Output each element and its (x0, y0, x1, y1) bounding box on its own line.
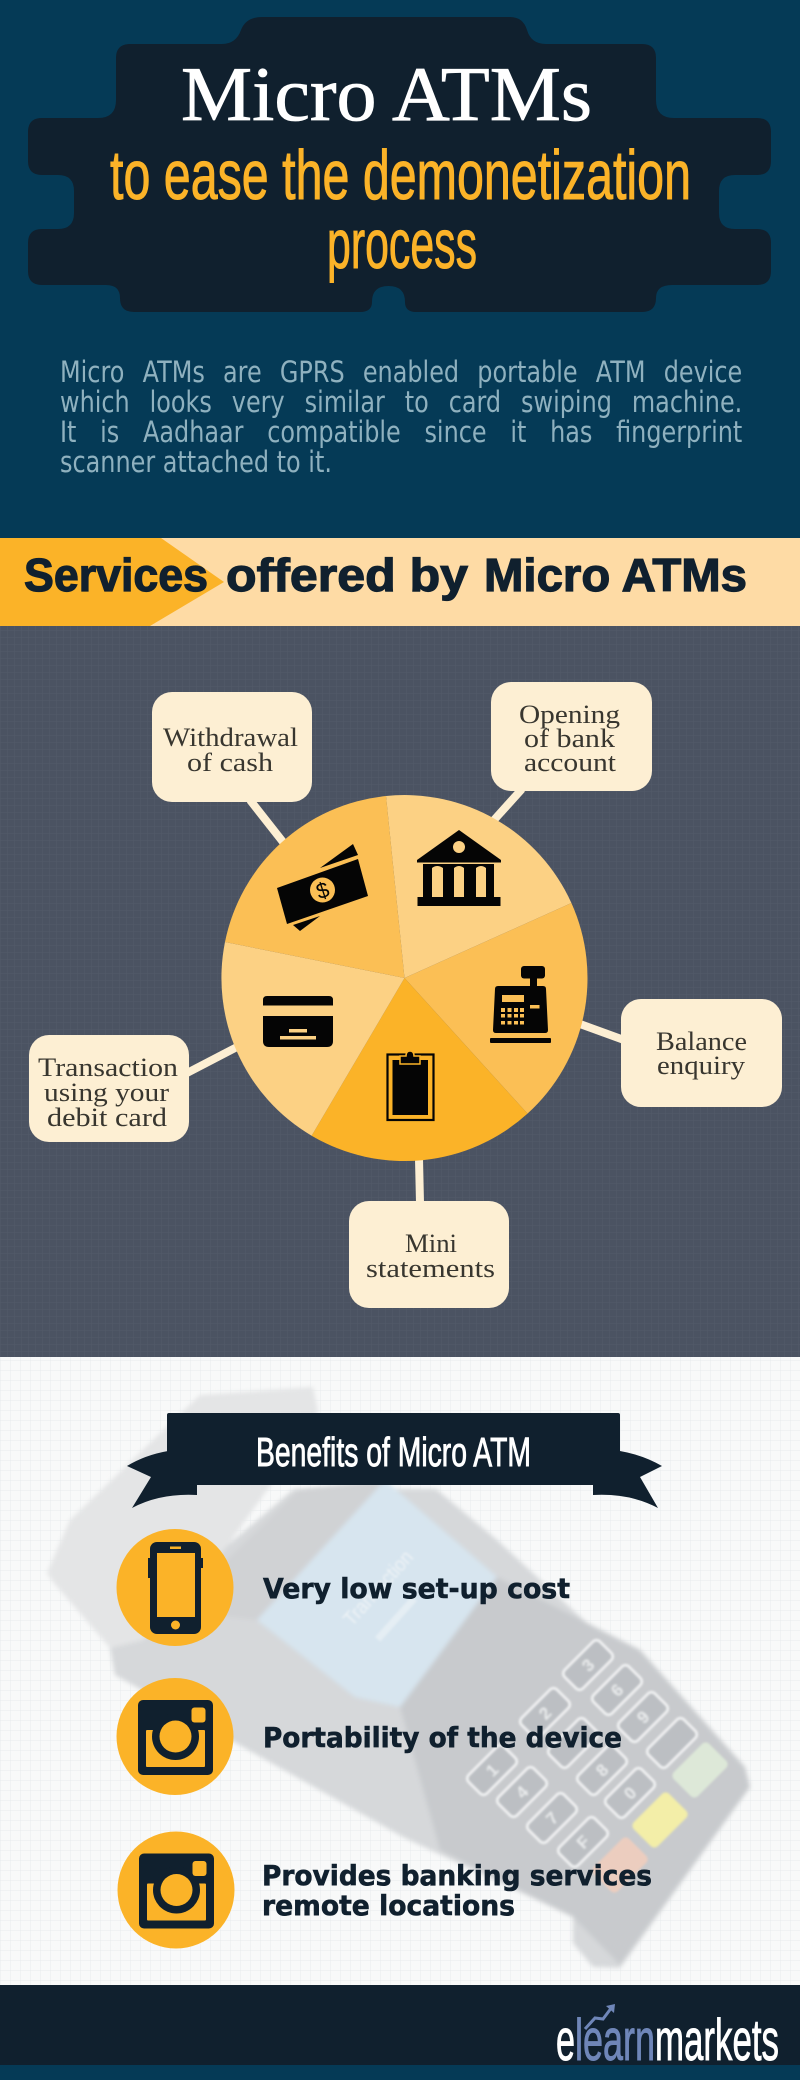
heading (24, 549, 747, 601)
illustration: faded POS device: 8 (592, 1760, 612, 1780)
icon: camera (118, 1832, 234, 1948)
callout: balance enquiry (621, 999, 782, 1107)
title plaque (28, 17, 771, 312)
heading: offered by (226, 549, 468, 601)
callout: transaction using your debit card (29, 1035, 189, 1142)
panel: benefits background (0, 1357, 800, 1985)
illustration: faded POS device: 2 (535, 1703, 555, 1723)
callout: transaction using your debit card: using your (44, 1078, 169, 1107)
callout: opening of bank account: account (524, 748, 617, 777)
icon: clipboard (388, 1051, 434, 1120)
intro paragraph: Micro ATMs are GPRS enabled portable ATM device (60, 355, 742, 389)
callout: mini statements: Mini (405, 1229, 457, 1258)
heading: Micro ATMs (484, 549, 747, 601)
callout: opening of bank account (491, 682, 652, 791)
illustration: faded POS device: 7 (542, 1808, 562, 1828)
benefit: portability of the device: Portability of the device (263, 1721, 622, 1754)
icon: debit card (263, 996, 333, 1047)
intro paragraph: which looks very similar to card swiping machine. (60, 385, 742, 419)
panel: services heading band (0, 538, 800, 626)
callout: balance enquiry: Balance (656, 1027, 747, 1056)
illustration: faded POS device: F (573, 1832, 594, 1853)
illustration: faded POS device: 6 (607, 1680, 627, 1700)
subtitle: process (327, 205, 477, 283)
callout: withdrawal of cash: Withdrawal (163, 723, 298, 752)
callout: opening of bank account: of bank (524, 724, 615, 753)
intro paragraph (60, 355, 742, 479)
benefit: very low set-up cost (116, 1529, 570, 1646)
illustration: faded POS device: 0 (620, 1783, 640, 1803)
callout: mini statements: statements (366, 1254, 495, 1283)
benefit: provides banking services remote locations: remote locations (262, 1889, 515, 1922)
benefit: provides banking services remote locations: Provides banking services (262, 1859, 652, 1892)
icon: cash: $ (313, 877, 332, 904)
callout: withdrawal of cash: of cash (187, 748, 273, 777)
arrow banner (0, 538, 224, 626)
connector lines (187, 789, 624, 1203)
callout: withdrawal of cash (152, 692, 312, 802)
illustration: faded POS device (47, 1387, 750, 1968)
icon: smartphone (116, 1529, 234, 1646)
callout: opening of bank account: Opening (519, 700, 620, 729)
callout: transaction using your debit card: debit card (47, 1103, 167, 1132)
benefit: provides banking services remote locations (118, 1832, 652, 1948)
benefit: portability of the device (116, 1678, 622, 1795)
logo: e (556, 2008, 575, 2073)
heading: Services (24, 549, 208, 601)
subtitle (110, 136, 691, 283)
illustration: faded POS device: 9 (633, 1707, 653, 1727)
icon: cash (277, 844, 368, 931)
ribbon text: Benefits of Micro ATM (256, 1429, 531, 1475)
callout: transaction using your debit card: Transaction (38, 1053, 178, 1082)
panel: footer (0, 1985, 800, 2080)
intro paragraph: It is Aadhaar compatible since it has fingerprint (60, 415, 742, 449)
logo (556, 2004, 779, 2073)
intro paragraph: scanner attached to it. (60, 445, 332, 479)
icon: cash register (490, 966, 551, 1043)
pie chart (221, 795, 588, 1161)
illustration: faded POS device: 3 (578, 1655, 598, 1675)
title: Micro ATMs (181, 51, 592, 137)
panel: services diagram (0, 626, 800, 1357)
callout: balance enquiry: enquiry (657, 1051, 745, 1080)
logo: learn (575, 2008, 655, 2073)
illustration: faded POS device: 4 (512, 1782, 533, 1802)
icon: bank (417, 830, 501, 906)
benefit: very low set-up cost: Very low set-up cost (263, 1572, 570, 1605)
callout: mini statements (349, 1201, 509, 1308)
panel: header background (0, 0, 800, 538)
icon: camera (116, 1678, 234, 1795)
ribbon heading (127, 1413, 662, 1508)
illustration: faded POS device: 1 (482, 1760, 502, 1780)
illustration: faded POS device: Transaction (339, 1547, 418, 1630)
